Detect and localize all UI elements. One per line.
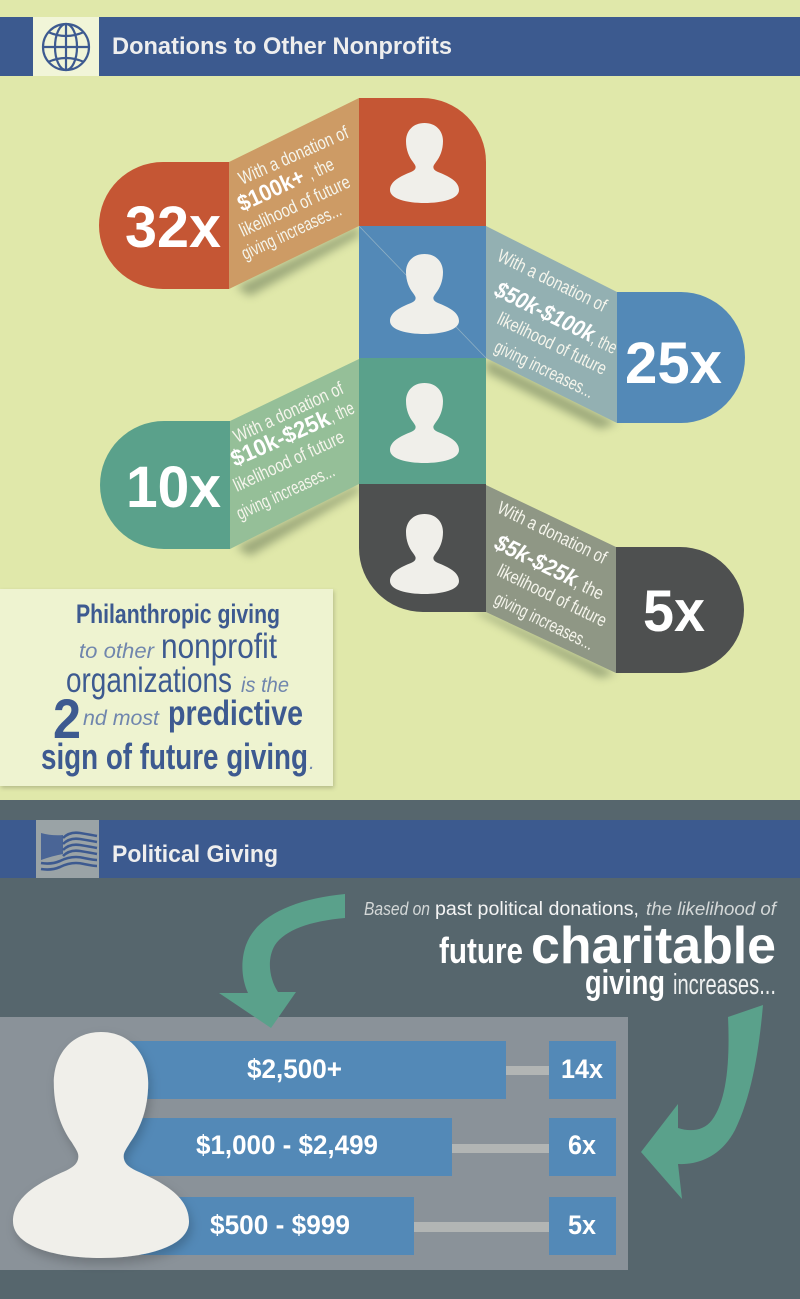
ribbon text: $50k-$100k: likelihood of future — [494, 308, 610, 379]
ribbon text: $10k-$25k: $10k-$25k — [226, 405, 334, 472]
ribbon text: $10k-$25k: With a donation of — [230, 377, 347, 447]
ribbon text: $5k-$25k: $5k-$25k — [490, 529, 583, 592]
callout: philanthropic giving: predictive — [168, 694, 303, 733]
bar row: $500 - $999 5x: $500 - $999 — [210, 1210, 350, 1240]
icon: large person — [13, 1032, 189, 1258]
panel: political giving — [0, 800, 800, 1299]
ribbon text: $100k+: $100k+ — [233, 163, 308, 217]
ribbon text: $5k-$25k — [490, 497, 611, 654]
panel: donations to other nonprofits — [0, 0, 800, 800]
icon: american flag — [41, 833, 97, 870]
callout: philanthropic giving: 2 — [53, 687, 81, 750]
callout: philanthropic giving: organizations — [66, 661, 232, 700]
callout: philanthropic giving: nd most — [83, 707, 160, 730]
header bar: donations — [0, 17, 800, 76]
ribbon text: $10k-$25k: likelihood of future — [230, 426, 347, 496]
ribbon text: $10k-$25k — [226, 377, 357, 524]
ribbon text: $50k-$100k: giving increases... — [491, 336, 598, 402]
callout: philanthropic giving: Philanthropic giving — [76, 599, 280, 629]
callout: philanthropic giving: is the — [241, 674, 289, 697]
intro text: charitable — [531, 917, 776, 975]
bar row: $1,000 - $2,499 6x — [110, 1118, 616, 1176]
intro text: giving — [585, 964, 665, 1002]
bar row: $500 - $999 5x: 5x — [568, 1210, 596, 1240]
callout: philanthropic giving: nonprofit — [161, 627, 277, 666]
bar row: $2,500+ 14x: $2,500+ — [247, 1054, 342, 1084]
ribbon text: $5k-$25k: , the — [571, 572, 607, 604]
step: 10x donation of $10k-$25k — [100, 358, 486, 549]
callout: philanthropic giving: to other — [79, 640, 155, 663]
header bar: political giving — [0, 820, 800, 878]
ribbon text: $100k+: With a donation of — [235, 121, 352, 189]
multiplier: 10x: 10x — [126, 455, 221, 520]
step: 25x donation of $50k-$100k — [359, 226, 745, 423]
bar row: $2,500+ 14x — [110, 1041, 616, 1099]
icon: globe — [43, 24, 89, 70]
bar row: $1,000 - $2,499 6x: $1,000 - $2,499 — [196, 1130, 378, 1160]
heading: donations: Donations to Other Nonprofits — [112, 33, 452, 60]
arrow: right curved — [641, 1005, 763, 1199]
ribbon text: $50k-$100k: With a donation of — [494, 245, 611, 316]
step: 32x donation of $100k+ — [99, 98, 486, 289]
bar row: $500 - $999 5x — [110, 1197, 616, 1255]
ribbon text: $50k-$100k — [490, 245, 621, 402]
ribbon text: $100k+: giving increases... — [238, 199, 345, 264]
intro text: past political donations, — [435, 899, 639, 920]
ribbon text: $5k-$25k: likelihood of future — [494, 560, 610, 631]
callout: philanthropic giving: . — [309, 751, 315, 774]
step: 5x donation of $5k-$25k — [359, 484, 744, 673]
intro text: Based on — [364, 899, 430, 919]
ribbon text: $100k+: likelihood of future — [236, 171, 353, 241]
ribbon text: $50k-$100k: , the — [588, 328, 621, 358]
ribbon text: $10k-$25k: giving increases... — [233, 460, 338, 524]
ribbon shadows — [236, 226, 617, 678]
ribbon text: $100k+: , the — [304, 153, 337, 184]
bar row: $2,500+ 14x: 14x — [561, 1054, 603, 1084]
multiplier: 5x: 5x — [643, 579, 705, 644]
intro text: the likelihood of — [646, 899, 778, 919]
multiplier: 25x: 25x — [625, 331, 722, 396]
ribbon text: $100k+ — [233, 121, 353, 264]
bar row: $1,000 - $2,499 6x: 6x — [568, 1130, 596, 1160]
ribbon text: $5k-$25k: With a donation of — [494, 497, 611, 568]
multiplier: 32x: 32x — [125, 195, 221, 260]
data panel background — [0, 1017, 628, 1270]
arrow: left curved — [219, 894, 345, 1028]
ribbon text: $5k-$25k: giving increases... — [491, 588, 598, 654]
ribbon text: $50k-$100k: $50k-$100k — [490, 276, 600, 347]
heading: political giving: Political Giving — [112, 841, 278, 868]
callout: philanthropic giving: sign of future giving — [41, 736, 308, 777]
intro text: future — [439, 930, 523, 971]
callout: philanthropic giving — [0, 589, 333, 786]
intro text — [364, 899, 778, 1002]
ribbon text: $10k-$25k: , the — [325, 397, 357, 427]
